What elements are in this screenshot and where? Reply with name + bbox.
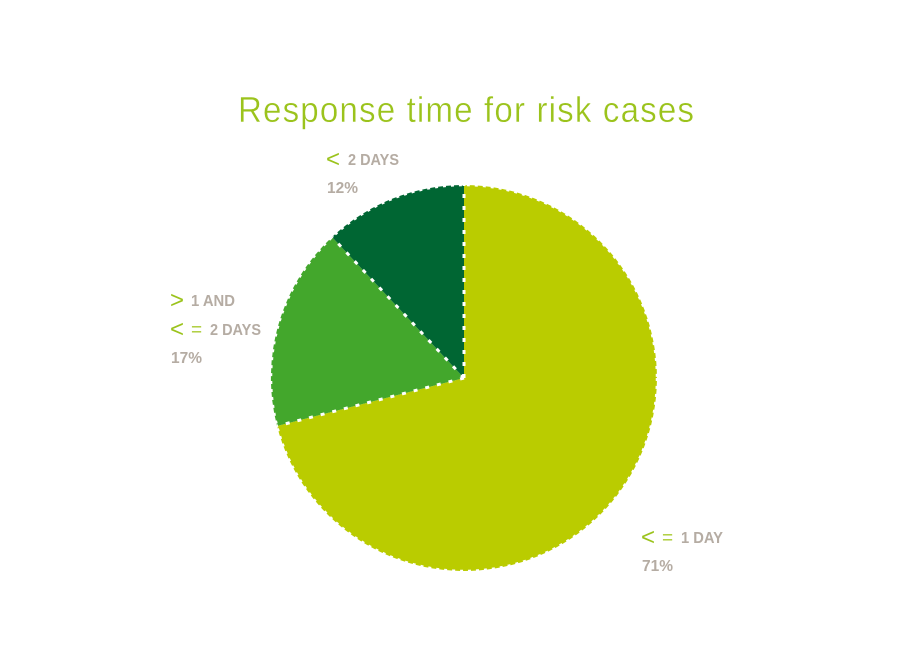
label: 2 days 12% <box>326 146 399 197</box>
label: 1 and 2 days 17%: 17% <box>171 350 202 367</box>
label: 1 and 2 days 17%: > <box>170 287 184 314</box>
label: 1 and 2 days 17%: = <box>191 320 202 341</box>
title: Response time for risk cases <box>238 91 694 130</box>
label: 1 and 2 days 17%: 2 DAYS <box>210 322 261 339</box>
label: 1 day 71%: 1 DAY <box>681 530 723 547</box>
label: 1 and 2 days 17%: 1 AND <box>191 293 235 310</box>
label: 1 day 71%: 71% <box>642 558 673 575</box>
label: 2 days 12%: 2 DAYS <box>348 152 399 169</box>
slice: 1 to 2 days 17% <box>271 237 464 426</box>
slice: over 2 days 12% <box>332 185 464 378</box>
label: 1 and 2 days 17% <box>170 287 261 367</box>
label: 1 day 71% <box>641 524 723 575</box>
label: 1 day 71%: < <box>641 524 655 551</box>
label: 1 day 71%: = <box>662 528 673 549</box>
slice: up to 1 day 71% <box>277 185 657 571</box>
label: 2 days 12%: 12% <box>327 180 358 197</box>
label: 2 days 12%: < <box>326 146 340 173</box>
label: 1 and 2 days 17%: < <box>170 316 184 343</box>
pie chart <box>271 185 657 571</box>
